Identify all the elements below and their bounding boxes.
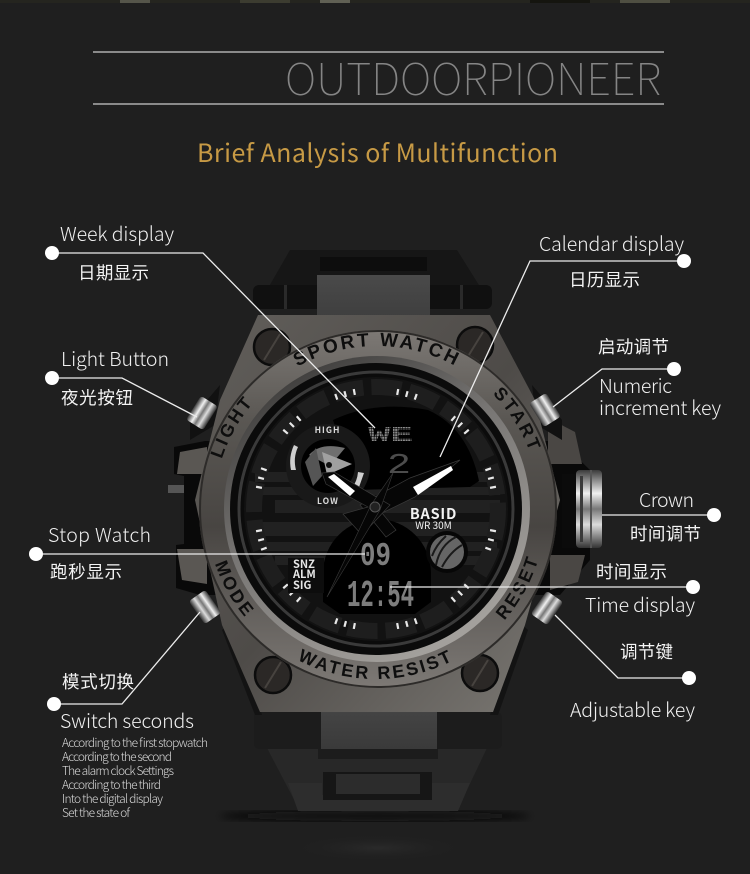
callout: week display: Week display	[60, 218, 174, 247]
bezel engravings: WATER RESIST	[300, 648, 449, 679]
side buttons	[186, 393, 563, 625]
bezel engravings: SPORT WATCH	[294, 332, 460, 365]
callout: time display: Time display	[585, 589, 695, 618]
ribbed knob	[426, 531, 468, 573]
sub dial	[286, 424, 370, 508]
callout: adjustable key: Adjustable key	[570, 694, 695, 723]
bezel	[199, 330, 557, 688]
callout: stop watch	[29, 519, 365, 584]
callout: light button	[45, 343, 197, 417]
callout: crown	[602, 484, 721, 546]
dial	[244, 377, 508, 641]
callout: adjustable key: 调节键	[620, 639, 673, 664]
bezel engravings: LIGHT	[210, 396, 250, 458]
switch seconds description: According to the third	[62, 776, 161, 793]
sub dial labels: HIGH	[315, 424, 340, 436]
mode labels: ALM	[292, 566, 316, 582]
callout: time display: 时间显示	[596, 559, 667, 584]
callout: numeric increment key	[553, 334, 721, 421]
watch hands	[322, 460, 460, 597]
mode labels	[288, 556, 324, 593]
stopwatch digits: 09	[360, 538, 391, 575]
right hand	[360, 460, 460, 537]
callout: numeric increment key: increment key	[599, 392, 721, 421]
bezel engravings: RESET	[496, 556, 537, 620]
bezel engravings	[210, 332, 541, 679]
brand mark: WR 30M	[415, 517, 452, 532]
watch illustration	[168, 250, 602, 850]
bezel engravings: MODE	[215, 560, 254, 616]
calendar digits: 2	[387, 449, 411, 482]
callout: light button: Light Button	[61, 343, 169, 372]
switch seconds description: Set the state of	[62, 804, 130, 821]
sub dial: LOW	[317, 495, 339, 507]
mode labels: SNZ	[293, 556, 315, 572]
top LCD window	[333, 407, 479, 490]
time digits: 12:54	[347, 575, 414, 618]
callout: time display	[390, 559, 700, 618]
callout: stop watch: 跑秒显示	[50, 559, 122, 584]
callout: week display	[45, 218, 375, 428]
callout: stop watch: Stop Watch	[48, 519, 151, 548]
callout: crown: 时间调节	[630, 521, 701, 546]
subtitle: Brief Analysis of Multifunction	[197, 134, 558, 170]
case	[195, 315, 560, 712]
callout: adjustable key	[555, 615, 696, 723]
mode labels: SIG	[293, 577, 311, 593]
switch seconds description	[62, 734, 208, 821]
ground shadow and reflection	[220, 811, 530, 862]
callout: calendar display	[440, 228, 691, 457]
top texture strip	[0, 0, 750, 3]
callout: switch seconds	[47, 612, 208, 821]
callout: week display: 日期显示	[78, 260, 149, 285]
brand title: OUTDOORPIONEER	[285, 44, 661, 108]
week digits: WE	[368, 425, 413, 448]
bezel engravings: START	[494, 388, 541, 448]
upper strap	[253, 250, 492, 335]
screws	[254, 327, 498, 693]
switch seconds description: Into the digital display	[62, 790, 163, 807]
second hand	[327, 473, 393, 597]
side blocks	[168, 385, 590, 715]
switch seconds description: According to the first stopwatch	[62, 734, 208, 751]
lower strap	[254, 688, 502, 811]
switch seconds description: The alarm clock Settings	[62, 762, 174, 779]
callout: switch seconds: Switch seconds	[60, 705, 194, 734]
callout: numeric increment key: 启动调节	[598, 334, 669, 359]
callout: calendar display: 日历显示	[569, 267, 640, 292]
brand mark: BASID	[410, 503, 457, 524]
callout: light button: 夜光按钮	[61, 385, 133, 410]
switch seconds description: According to the second	[62, 748, 172, 765]
crown	[562, 470, 602, 548]
bottom LCD window	[323, 519, 431, 618]
callout: numeric increment key: Numeric	[599, 370, 672, 399]
callout: crown: Crown	[639, 484, 694, 513]
callout: switch seconds: 模式切换	[62, 669, 134, 694]
left hand	[322, 472, 390, 535]
tick marks	[252, 385, 500, 633]
callout: calendar display: Calendar display	[539, 228, 684, 257]
